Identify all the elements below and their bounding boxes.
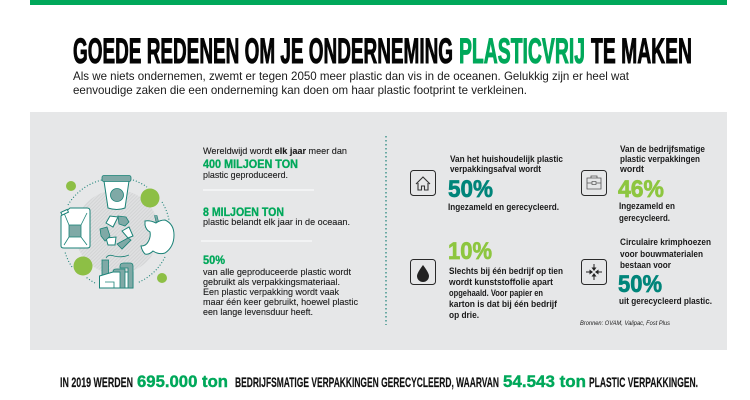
intro text bbox=[73, 69, 630, 97]
text block: 400 miljoen ton: Wereldwijd wordt elk jaar meer dan bbox=[203, 146, 347, 157]
stat: kunststoffolie 10%: wordt kunststoffolie apart bbox=[448, 277, 554, 288]
stat: bedrijfsmatig 46%: Ingezameld en bbox=[619, 201, 675, 212]
stat: huishoudelijk 50%: 50% bbox=[448, 176, 493, 203]
text block: 50% verpakkingsmateriaal: Een plastic verpakking wordt vaak bbox=[203, 287, 339, 298]
footer statement: BEDRIJFSMATIGE VERPAKKINGEN GERECYCLEERD, WAARVAN bbox=[235, 374, 499, 390]
stat: bedrijfsmatig 46%: Van de bedrijfsmatige bbox=[620, 144, 705, 155]
title: PLASTICVRIJ bbox=[459, 32, 585, 71]
stat: kunststoffolie 10%: 10% bbox=[448, 238, 492, 265]
icon: compress arrows bbox=[582, 260, 606, 284]
stat: bedrijfsmatig 46%: gerecycleerd. bbox=[619, 213, 670, 224]
stat: krimphoezen 50% bbox=[618, 237, 712, 307]
stat: huishoudelijk 50%: Ingezameld en gerecycleerd. bbox=[448, 202, 559, 213]
footer statement bbox=[60, 373, 698, 391]
icon: green dots bbox=[66, 181, 167, 283]
footer statement: 54.543 ton bbox=[503, 373, 586, 391]
text block: 50% verpakkingsmateriaal: gebruikt als verpakkingsmateriaal. bbox=[203, 277, 340, 288]
stat: krimphoezen 50%: 50% bbox=[618, 271, 662, 298]
illustration: plastic cycle bbox=[61, 176, 174, 288]
icon: apple bbox=[141, 216, 174, 254]
intro text: Als we niets ondernemen, zwemt er tegen 2050 meer plastic dan vis in de oceanen. Gelukkig zijn er heel wat bbox=[73, 69, 630, 83]
stat: kunststoffolie 10%: op drie. bbox=[449, 310, 479, 321]
panel: statistics background bbox=[30, 112, 727, 350]
text block: 50% verpakkingsmateriaal: een lange levensduur heeft. bbox=[203, 307, 313, 318]
text block: 400 miljoen ton: 400 MILJOEN TON bbox=[203, 159, 298, 171]
icon: house bbox=[410, 170, 436, 196]
sources: Bronnen: OVAM, Valipac, Fost Plus bbox=[580, 321, 670, 327]
text block: 8 miljoen ton bbox=[203, 207, 350, 228]
text block: 400 miljoen ton bbox=[203, 146, 347, 181]
intro text: eenvoudige zaken die een onderneming kan doen om haar plastic footprint te verkleinen. bbox=[73, 83, 527, 97]
icon: drop bbox=[410, 260, 436, 284]
top green bar bbox=[30, 0, 727, 5]
stat: bedrijfsmatig 46%: 46% bbox=[618, 176, 664, 203]
stat: kunststoffolie 10%: Slechts bij één bedrijf op tien bbox=[449, 266, 563, 277]
stat: huishoudelijk 50%: verpakkingsafval wordt bbox=[450, 164, 542, 175]
text block: 50% verpakkingsmateriaal: van alle geproduceerde plastic wordt bbox=[203, 267, 351, 278]
stat: krimphoezen 50%: voor bouwmaterialen bbox=[620, 249, 703, 260]
text block: 400 miljoen ton: plastic geproduceerd. bbox=[203, 170, 288, 181]
stat: bedrijfsmatig 46%: wordt bbox=[619, 164, 645, 175]
text block: 50% verpakkingsmateriaal: 50% bbox=[203, 255, 225, 267]
icon: factory bbox=[100, 255, 133, 288]
icon: recycling symbol bbox=[100, 216, 133, 249]
stat: kunststoffolie 10% bbox=[448, 238, 563, 321]
text block: 8 miljoen ton: 8 MILJOEN TON bbox=[203, 207, 284, 219]
stat: krimphoezen 50%: Circulaire krimphoezen bbox=[620, 237, 711, 248]
stat: krimphoezen 50%: uit gerecycleerd plastic. bbox=[619, 296, 712, 307]
stat: kunststoffolie 10%: karton is dat bij één bedrijf bbox=[449, 299, 558, 310]
stat: kunststoffolie 10%: opgehaald. Voor papier en bbox=[449, 288, 543, 299]
icon: jerry can bbox=[61, 208, 90, 248]
text block: 50% verpakkingsmateriaal: maar één keer gebruikt, hoewel plastic bbox=[203, 297, 358, 308]
stat: huishoudelijk 50% bbox=[448, 154, 563, 213]
stat: bedrijfsmatig 46% bbox=[618, 144, 705, 224]
icon: cup bbox=[102, 176, 131, 210]
footer statement: IN 2019 WERDEN bbox=[60, 374, 133, 390]
icon: briefcase bbox=[582, 170, 606, 196]
stat: bedrijfsmatig 46%: plastic verpakkingen bbox=[620, 154, 700, 165]
stat: huishoudelijk 50%: Van het huishoudelijk plastic bbox=[450, 154, 563, 165]
text block: 50% verpakkingsmateriaal bbox=[203, 255, 358, 318]
footer statement: 695.000 ton bbox=[137, 373, 228, 391]
text block: 8 miljoen ton: plastic belandt elk jaar in de oceaan. bbox=[203, 217, 350, 228]
stat: krimphoezen 50%: bestaan voor bbox=[620, 260, 671, 271]
